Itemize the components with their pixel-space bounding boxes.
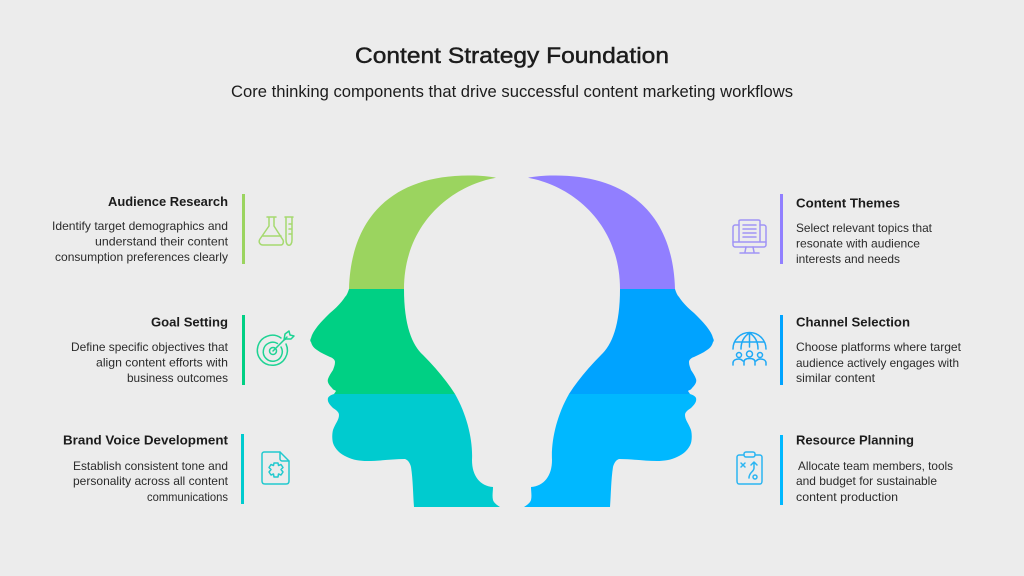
heading: Content Themes bbox=[796, 196, 900, 210]
accent bar bbox=[241, 434, 244, 504]
accent bar bbox=[242, 315, 245, 385]
description: Establish consistent tone and bbox=[73, 459, 228, 473]
accent bar bbox=[780, 315, 783, 385]
accent bar bbox=[780, 435, 783, 505]
panel: audience research bbox=[52, 194, 293, 264]
heading: Audience Research bbox=[108, 194, 228, 209]
description: communications bbox=[147, 490, 228, 504]
description bbox=[52, 219, 229, 264]
subtitle: Core thinking components that drive successful content marketing workflows bbox=[231, 82, 793, 101]
icon: globe and people bbox=[733, 332, 766, 365]
description: business outcomes bbox=[127, 371, 228, 385]
description bbox=[796, 459, 953, 504]
icon: monitor with document bbox=[733, 220, 766, 253]
description bbox=[796, 221, 933, 266]
description: similar content bbox=[796, 371, 876, 385]
description bbox=[796, 340, 962, 385]
panel: resource planning bbox=[737, 432, 953, 505]
description: consumption preferences clearly bbox=[55, 250, 228, 264]
title: Content Strategy Foundation bbox=[355, 43, 669, 68]
head segment: audience research bbox=[349, 175, 496, 289]
description bbox=[71, 340, 229, 385]
icon: flask and test tube bbox=[259, 217, 293, 245]
right head silhouette bbox=[524, 175, 714, 507]
panel: content themes bbox=[733, 194, 933, 266]
description: audience actively engages with bbox=[796, 356, 959, 370]
description: resonate with audience bbox=[796, 236, 920, 250]
icon: document with gear bbox=[262, 452, 289, 484]
head segment: resource planning bbox=[524, 394, 696, 507]
accent bar bbox=[242, 194, 245, 264]
head segment: channel selection bbox=[569, 289, 714, 394]
head segment: goal setting bbox=[310, 289, 455, 394]
description: understand their content bbox=[95, 234, 229, 248]
left head silhouette bbox=[310, 175, 500, 507]
description: interests and needs bbox=[796, 252, 900, 266]
description: align content efforts with bbox=[96, 356, 228, 370]
description: and budget for sustainable bbox=[796, 474, 937, 488]
icon: target bbox=[257, 331, 294, 365]
description: content production bbox=[796, 490, 898, 504]
heading: Brand Voice Development bbox=[63, 432, 229, 448]
icon: clipboard plan bbox=[737, 452, 762, 484]
panel: brand voice development bbox=[63, 432, 289, 504]
heading: Channel Selection bbox=[796, 314, 910, 330]
heading: Goal Setting bbox=[151, 314, 228, 330]
description: Select relevant topics that bbox=[796, 221, 933, 235]
description: Identify target demographics and bbox=[52, 219, 228, 233]
description bbox=[73, 459, 229, 504]
description: Choose platforms where target bbox=[796, 340, 962, 354]
panel: channel selection bbox=[733, 314, 962, 385]
panel: goal setting bbox=[71, 314, 294, 385]
description: personality across all content bbox=[73, 474, 229, 488]
description: Allocate team members, tools bbox=[798, 459, 953, 473]
description: Define specific objectives that bbox=[71, 340, 229, 354]
heading: Resource Planning bbox=[796, 432, 914, 448]
head segment: content themes bbox=[528, 175, 675, 289]
accent bar bbox=[780, 194, 783, 264]
head segment: brand voice bbox=[328, 394, 500, 507]
